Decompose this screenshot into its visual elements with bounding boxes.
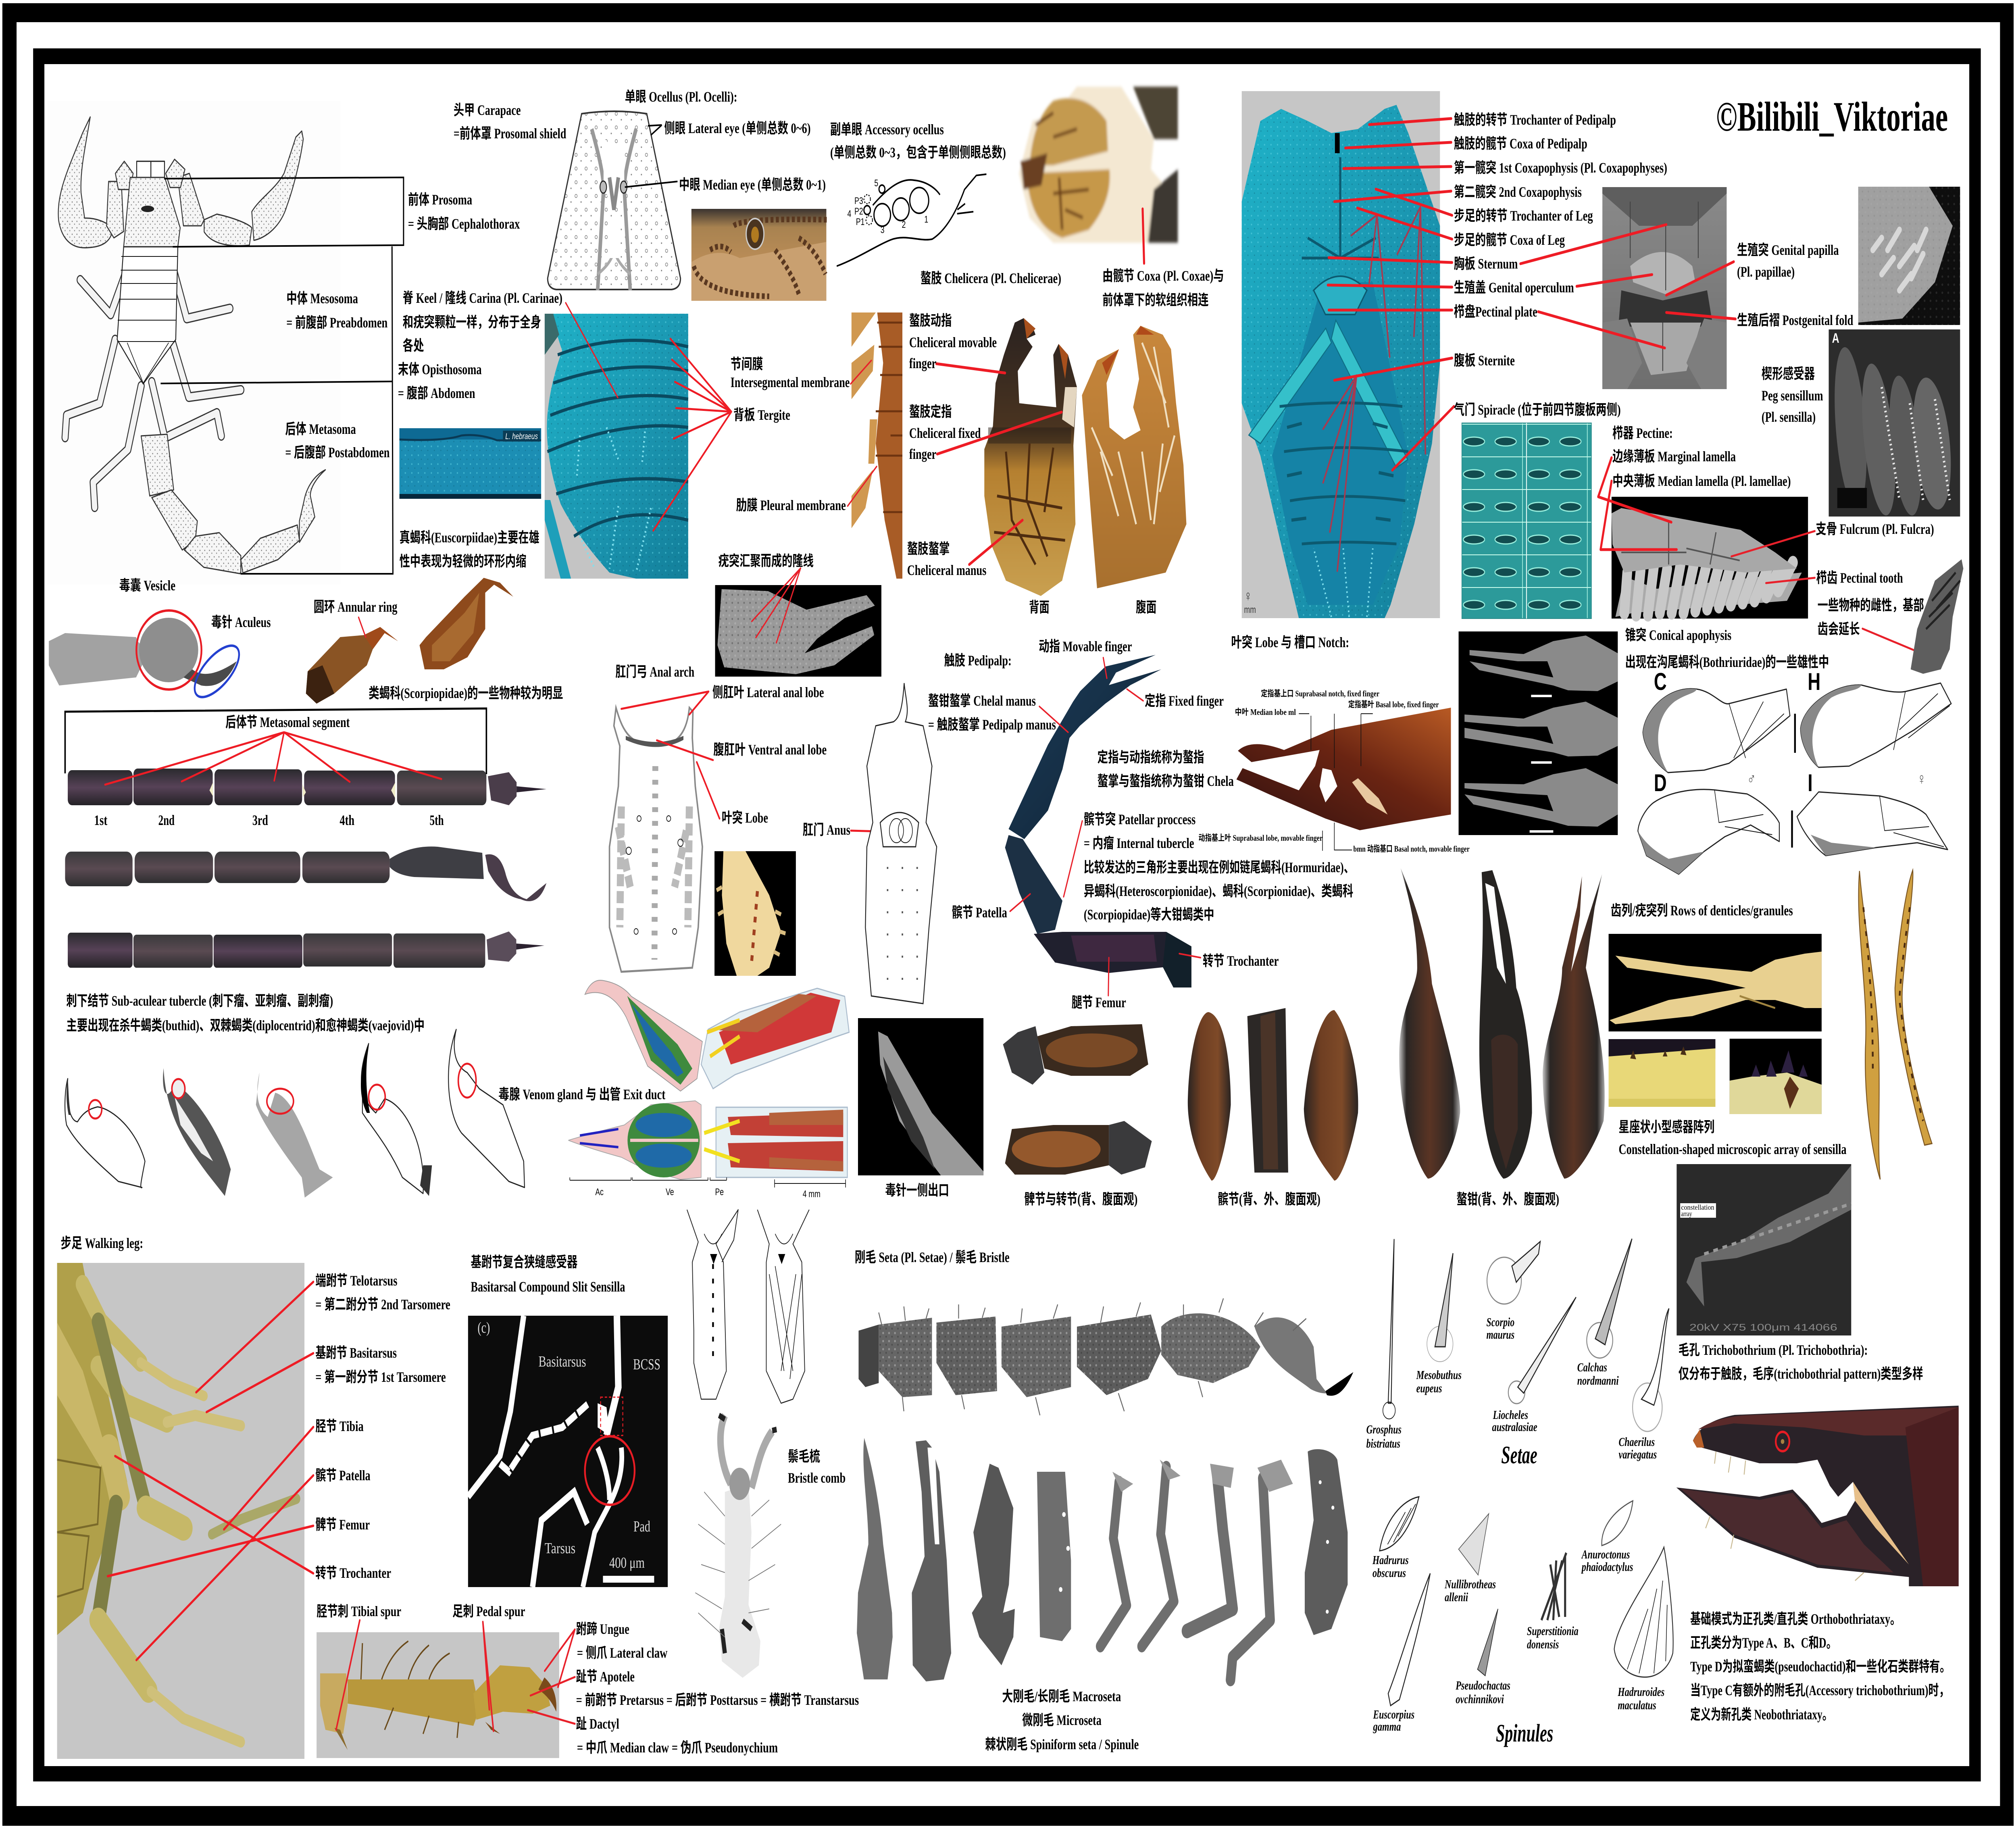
text: keel note line 2: 各处 <box>403 337 424 354</box>
species labels: spinules: Hadruroides <box>1618 1685 1664 1699</box>
segment labels: 5th <box>429 812 444 828</box>
label: movable finger en 1: Cheliceral movable <box>909 334 997 350</box>
label: coxa: 由髋节 Coxa (Pl. Coxae)与 <box>1102 268 1224 284</box>
label: patellar process: 髌节突 Patellar proccess <box>1084 811 1195 827</box>
label: sternite: 腹板 Sternite <box>1454 352 1515 369</box>
heading: walking leg: 步足 Walking leg: <box>60 1235 143 1251</box>
photo: metasoma SEM bristles <box>858 1298 1353 1415</box>
drawing: chela H female: ♂ <box>1747 770 1756 788</box>
red leaders: walking leg <box>108 1282 313 1660</box>
segment labels: 2nd <box>158 812 175 828</box>
illustration: whole scorpion line drawing <box>47 101 340 585</box>
label: movable finger zh: 螯肢动指 <box>909 312 952 329</box>
label: anus: 肛门 Anus <box>803 822 850 838</box>
metasoma row 1: ventral with labels <box>68 769 546 805</box>
label: lobe and notch: 叶突 Lobe 与 槽口 Notch: <box>1231 634 1349 650</box>
leaders: chelicera parts <box>936 364 1062 565</box>
red leaders: fulcrum and tooth <box>1731 531 1938 660</box>
label: ungue: 跗蹄 Ungue <box>576 1621 629 1637</box>
label: dactyl: 趾 Dactyl <box>576 1716 619 1732</box>
caption: patella views: 髌节(背、外、腹面观) <box>1218 1191 1320 1207</box>
photo: three chelae SEM <box>1459 631 1618 835</box>
heading: basitarsal slit sensilla en: Basitarsal Compound Slit Sensilla <box>471 1279 625 1295</box>
label: spiracle: 气门 Spiracle (位于前四节腹板两侧) <box>1454 402 1621 418</box>
label: peg sensillum zh: 楔形感受器 <box>1762 366 1815 382</box>
leaders: keels <box>752 568 801 643</box>
diagram: ocelli arrangement: P2 <box>854 206 863 217</box>
photo: constellation array SEM: constellation <box>1681 1204 1714 1212</box>
photo: chelicerae dorsal view <box>1019 87 1178 243</box>
label: median lamella: 中央薄板 Median lamella (Pl. lamellae) <box>1612 473 1791 489</box>
photo: lateral body brown <box>852 312 902 579</box>
label: trochanter leg: 转节 Trochanter <box>315 1565 391 1581</box>
label: median eye: 中眼 Median eye (单侧总数 0~1) <box>679 177 826 193</box>
illustrations: setae drawings <box>1383 1239 1669 1431</box>
label: bristle comb zh: 鬃毛梳 <box>788 1448 820 1465</box>
label: vesicle: 毒囊 Vesicle <box>119 577 175 594</box>
label: pectine: 栉器 Pectine: <box>1612 425 1673 441</box>
label: keel made of granules: 疣突汇聚而成的隆线 <box>719 553 814 569</box>
text: female pectine note 1: 一些物种的雌性，基部 <box>1818 597 1924 613</box>
label: trochanter of leg: 步足的转节 Trochanter of Leg <box>1454 208 1593 224</box>
label: median claw: = 中爪 Median claw = 伪爪 Pseudonychium <box>577 1740 778 1756</box>
micro-CT: BCSS image: (c) <box>477 1319 490 1336</box>
text: patellar note 3: (Scorpiopidae)等大钳蝎类中 <box>1084 906 1214 923</box>
scale bars: venom gland: 4 mm <box>803 1189 821 1200</box>
drawing: chela C male <box>1643 668 1795 773</box>
text: orthobothriotaxy line 2: 正孔类分为Type A、B、C和D。 <box>1690 1635 1837 1651</box>
segment labels <box>94 812 444 828</box>
caption: aculeus opening: 毒针一侧出口 <box>885 1182 949 1198</box>
text: orthobothriotaxy line 3: Type D为拟蛮蝎类(pseudochactid)和一些化石类群特有。 <box>1690 1658 1950 1675</box>
label: pleural membrane: 肋膜 Pleural membrane <box>736 497 846 513</box>
label: aculeus: 毒针 Aculeus <box>211 614 271 630</box>
photo: dorsal mesosoma teal <box>545 314 688 579</box>
photo: long yellow fingers <box>1859 870 1932 1179</box>
photo: constellation array SEM <box>1677 1164 1851 1335</box>
label: fixed finger en 2: finger <box>909 446 936 462</box>
scale bars: venom gland: Ac <box>595 1187 604 1198</box>
species labels: setae: Grosphus <box>1366 1423 1402 1436</box>
leaders: leg tip <box>336 1620 575 1731</box>
photo grid: spiracles <box>1462 423 1591 619</box>
label: genital papilla: 生殖突 Genital papilla <box>1737 242 1839 258</box>
micro-CT: BCSS image: BCSS <box>633 1356 660 1373</box>
drawing: chela H female: H <box>1808 668 1820 696</box>
photo: chelicera dorsal <box>984 318 1077 596</box>
leader: coxa <box>1143 209 1144 263</box>
illustration: anal segment ventral with anus <box>865 683 937 1004</box>
text: chela note: 螯掌与螯指统称为螯钳 Chela <box>1098 773 1234 789</box>
micro-CT: BCSS image: Tarsus <box>545 1540 575 1557</box>
label: carapace: 头甲 Carapace <box>454 102 521 118</box>
leaders: genital region <box>1520 225 1735 348</box>
label: metasomal segment: 后体节 Metasomal segment <box>225 714 350 730</box>
illustrations: spinules drawings <box>1380 1497 1673 1706</box>
photo: constellation array SEM: array <box>1681 1210 1692 1218</box>
species labels: setae: Scorpio <box>1487 1315 1514 1329</box>
label: coxa of leg: 步足的髋节 Coxa of Leg <box>1454 232 1565 248</box>
species labels: spinules: Euscorpius <box>1373 1708 1414 1721</box>
drawing: chela I female <box>1797 769 1947 856</box>
diagram: ocelli arrangement: 3 <box>881 225 885 235</box>
label: movable finger: 动指 Movable finger <box>1039 638 1132 654</box>
label: bristle comb en: Bristle comb <box>788 1470 846 1486</box>
line drawings: tarsi <box>687 1210 809 1403</box>
label: macroseta: 大刚毛/长刚毛 Macroseta <box>1002 1688 1121 1704</box>
species labels: spinules: donensis <box>1527 1637 1559 1651</box>
label: chelicera: 螯肢 Chelicera (Pl. Chelicerae) <box>921 270 1061 286</box>
label: lateral eye: 侧眼 Lateral eye (单侧总数 0~6) <box>664 120 811 136</box>
drawing: telson 5 <box>448 1029 525 1187</box>
label: pretarsus synonyms: = 前跗节 Pretarsus = 后跗节 Posttarsus = 横跗节 Transtarsus <box>576 1692 859 1708</box>
photo: yellow anal segment <box>714 851 796 976</box>
label: scorpiopidae note: 类蝎科(Scorpiopidae)的一些物种较为明显 <box>369 685 563 701</box>
label: ventral anal lobe: 腹肛叶 Ventral anal lobe <box>713 742 827 758</box>
label: pectinal plate: 栉盘Pectinal plate <box>1454 304 1537 320</box>
label: lateral claw: = 侧爪 Lateral claw <box>577 1645 668 1661</box>
species labels: setae: maurus <box>1487 1328 1514 1342</box>
label: prosomal shield: =前体罩 Prosomal shield <box>454 125 566 142</box>
photo: peg sensillum SEM <box>1829 329 1960 518</box>
photo: ventral body teal: mm <box>1244 604 1256 615</box>
species labels: setae: Calchas <box>1577 1360 1607 1374</box>
label: fixed finger: 定指 Fixed finger <box>1145 693 1224 709</box>
label: second coxapophysis: 第二髋突 2nd Coxapophysis <box>1454 184 1582 200</box>
caption: chela views: 螯钳(背、外、腹面观) <box>1456 1191 1559 1207</box>
label: femur: 腿节 Femur <box>1072 994 1126 1010</box>
species labels: setae: Liocheles <box>1493 1408 1528 1422</box>
species labels: spinules: phaiodactylus <box>1581 1560 1633 1574</box>
label: tergite: 背板 Tergite <box>733 407 790 423</box>
label: femur leg: 髀节 Femur <box>315 1517 370 1533</box>
text: sub-aculear note: 主要出现在杀牛蝎类(buthid)、双棘蝎类(diplocentrid)和愈神蝎类(vaejovid)中 <box>66 1017 425 1033</box>
diagram: ocelli arrangement: 5 <box>874 178 878 189</box>
photo: leg tip with spurs <box>317 1632 559 1758</box>
photos: bristle appendages row <box>857 1438 1347 1681</box>
photo: patella three views <box>1188 1008 1358 1181</box>
species labels: setae: Chaerilus <box>1619 1435 1655 1449</box>
label: lateral anal lobe: 侧肛叶 Lateral anal lobe <box>712 684 824 700</box>
heading: basitarsal slit sensilla zh: 基跗节复合狭缝感受器 <box>471 1254 578 1270</box>
drawing: chela C male: C <box>1654 668 1667 696</box>
label: pedipalp manus: = 触肢螯掌 Pedipalp manus <box>928 717 1056 733</box>
label: 2nd tarsomere: = 第二跗分节 2nd Tarsomere <box>315 1296 450 1312</box>
leaders: metasomal segment <box>105 732 442 785</box>
micro-CT: BCSS image: Pad <box>633 1518 650 1535</box>
label: basitarsus: 基跗节 Basitarsus <box>315 1345 397 1361</box>
metasoma row 3: dorsal <box>68 931 544 968</box>
text: euscorpiidae note line 2: 性中表现为轻微的环形内缩 <box>400 553 526 569</box>
species labels: setae: variegatus <box>1619 1448 1657 1461</box>
label: pedal spur: 足刺 Pedal spur <box>452 1603 525 1619</box>
species labels: spinules: Pseudochactas <box>1455 1679 1510 1692</box>
label: accessory ocellus: 副单眼 Accessory ocellus <box>830 121 944 137</box>
red leaders: keel and tergite <box>566 303 731 531</box>
label: constellation array en: Constellation-shaped microscopic array of sensilla <box>1619 1141 1847 1157</box>
model: venom gland dorsal <box>569 1101 848 1179</box>
metasoma row 2: lateral <box>65 846 546 901</box>
photo: yellow chela on black <box>1609 934 1822 1031</box>
diagram: ocelli arrangement: P1 <box>856 217 864 227</box>
leaders: membranes <box>848 360 877 506</box>
label: manus en: Cheliceral manus <box>907 562 986 578</box>
bracket: metasomal segments <box>65 708 486 774</box>
label: fulcrum: 支骨 Fulcrum (Pl. Fulcra) <box>1816 521 1934 537</box>
photo: ventral body teal <box>1242 91 1440 618</box>
small labels: notch terms: bmn 动指基口 Basal notch, movable finger <box>1353 844 1470 854</box>
text: orthobothriotaxy line 1: 基础模式为正孔类/直孔类 Orthobothriataxy。 <box>1690 1611 1901 1627</box>
label: annular ring: 圆环 Annular ring <box>314 599 398 615</box>
species labels: spinules: allenii <box>1445 1590 1468 1604</box>
label: telotarsus: 端跗节 Telotarsus <box>315 1273 397 1289</box>
leader: annular ring <box>358 617 366 637</box>
label: mesosoma: 中体 Mesosoma <box>286 290 358 306</box>
heading: seta: 刚毛 Seta (Pl. Setae) / 鬃毛 Bristle <box>855 1249 1010 1265</box>
photo: femur ventral <box>1005 1121 1152 1175</box>
label: venom gland: 毒腺 Venom gland 与 出管 Exit duct <box>498 1086 666 1102</box>
diagram: ocelli arrangement: P3 <box>854 196 863 206</box>
species labels: spinules: Superstitionia <box>1527 1624 1579 1638</box>
species labels: spinules: ovchinnikovi <box>1456 1692 1504 1706</box>
photo: chelicera ventral <box>1082 326 1186 588</box>
species labels: spinules: Hadrurus <box>1372 1553 1409 1567</box>
small labels: notch terms: 定指基叶 Basal lobe, fixed finger <box>1348 700 1439 709</box>
label: intersegmental membrane: 节间膜 <box>731 356 763 372</box>
drawing: chela I female: I <box>1808 769 1813 797</box>
segment labels: 3rd <box>252 812 268 828</box>
leaders: anal segment <box>621 692 720 819</box>
label: spiniform seta: 棘状刚毛 Spiniform seta / Spinule <box>985 1736 1139 1752</box>
red leaders: ventral body <box>1328 119 1454 470</box>
label: genital operculum: 生殖盖 Genital operculum <box>1454 279 1574 296</box>
label: tibial spur: 胫节刺 Tibial spur <box>317 1603 401 1619</box>
photo: peg sensillum SEM: A <box>1832 331 1839 346</box>
label: opisthosoma: 末体 Opisthosoma <box>398 361 482 377</box>
red leaders: pectine <box>1598 458 1677 550</box>
label: dorsal: 背面 <box>1029 599 1050 615</box>
text: euscorpiidae note line 1: 真蝎科(Euscorpiidae)主要在雄 <box>400 529 539 546</box>
label: coxa of pedipalp: 触肢的髋节 Coxa of Pedipalp <box>1454 135 1587 152</box>
species labels: setae: australasiae <box>1492 1420 1537 1434</box>
text: conical apophysis note: 出现在沟尾蝎科(Bothriuridae)的一些雄性中 <box>1625 654 1829 670</box>
photo: L. hebraeus annular ring strip: L. hebraeus <box>505 431 538 441</box>
label: intersegmental membrane english: Intersegmental membrane <box>731 374 850 390</box>
photo: chela with notch labels <box>1236 708 1451 851</box>
photo: chela with trichobothrium <box>1677 1406 1959 1586</box>
photo: median eye close-up <box>691 209 829 301</box>
drawing: telson 3 grey <box>256 1073 333 1198</box>
label: keel carina: 脊 Keel / 隆线 Carina (Pl. Carinae) <box>403 290 562 306</box>
label: patella: 髌节 Patella <box>952 904 1007 921</box>
species labels: spinules: maculatus <box>1618 1698 1656 1712</box>
segment labels: 1st <box>94 812 108 828</box>
diagram: ocelli arrangement <box>837 174 986 266</box>
label: movable finger en 2: finger <box>909 355 936 371</box>
bracket lines: body tagmata <box>160 177 404 574</box>
heading: setae: Setae <box>1501 1441 1537 1469</box>
species labels: setae: bistriatus <box>1366 1437 1400 1450</box>
label: cephalothorax: = 头胸部 Cephalothorax <box>408 216 520 232</box>
label: postgenital fold: 生殖后褶 Postgenital fold <box>1737 312 1854 328</box>
label: fixed finger en 1: Cheliceral fixed <box>909 425 981 441</box>
photo: denticles close-up 2 <box>1730 1039 1822 1114</box>
scale bars: venom gland <box>570 1177 846 1200</box>
label: fixed finger zh: 螯肢定指 <box>909 404 952 420</box>
species labels: spinules: Nullibrotheas <box>1444 1577 1496 1591</box>
text: orthobothriotaxy line 5: 定义为新孔类 Neobothriataxy。 <box>1690 1706 1833 1723</box>
label: trichobothrium: 毛孔 Trichobothrium (Pl. Trichobothria): <box>1679 1342 1868 1358</box>
text: patellar note 1: 比较发达的三角形主要出现在例如链尾蝎科(Hormuridae)、 <box>1084 859 1354 875</box>
drawing: chela H female <box>1747 668 1951 788</box>
text: accessory ocellus count: (单侧总数 0~3，包含于单侧侧眼总数) <box>830 144 1006 160</box>
photo: annular ring dorsal <box>420 578 513 669</box>
label: postabdomen: = 后腹部 Postabdomen <box>285 444 390 460</box>
photo: constellation array SEM: 20kV X75 100μm 414066 <box>1689 1322 1837 1333</box>
drawing: chela D male: D <box>1654 769 1667 797</box>
small labels: notch terms: 动指基上叶 Suprabasal lobe, movable finger <box>1199 833 1322 843</box>
species labels: spinules: obscurus <box>1372 1566 1406 1580</box>
leader: anus <box>851 831 893 832</box>
label: sensilla plural: (Pl. sensilla) <box>1762 409 1816 425</box>
label: trochanter: 转节 Trochanter <box>1203 953 1279 969</box>
scale bars: venom gland: Pe <box>715 1187 724 1198</box>
photo: keeled chela SEM <box>715 585 881 677</box>
label: peg sensillum en: Peg sensillum <box>1762 387 1823 404</box>
label: patella leg: 髌节 Patella <box>315 1467 371 1483</box>
label: lobe: 叶突 Lobe <box>722 810 768 826</box>
heading: ocellus: 单眼 Ocellus (Pl. Ocelli): <box>625 89 737 105</box>
scale bars: venom gland: Ve <box>666 1187 674 1198</box>
micro-CT: BCSS image <box>468 1316 668 1587</box>
small labels: notch terms <box>1199 689 1470 854</box>
label: sub-aculear tubercle: 刺下结节 Sub-aculear tubercle (刺下瘤、亚刺瘤、副刺瘤) <box>66 993 333 1009</box>
photo: ventral body teal: ♀ <box>1244 587 1252 604</box>
caption: femur views: 髀节与转节(背、腹面观) <box>1024 1191 1137 1207</box>
photo: female pectine <box>1911 559 1963 674</box>
text: patellar note 2: 异蝎科(Heteroscorpionidae)、蝎科(Scorpionidae)、类蝎科 <box>1084 883 1353 899</box>
illustration: pedipalp dark photo <box>1005 655 1191 987</box>
photo: walking legs <box>57 1263 304 1759</box>
diagram: ocelli arrangement: 1 <box>924 214 928 225</box>
photo: genital papilla SEM <box>1858 187 1960 325</box>
photo: pectine <box>1612 497 1808 619</box>
text: female pectine note 2: 齿会延长 <box>1818 621 1860 637</box>
label: apotele: 趾节 Apotele <box>576 1669 635 1685</box>
photo: L. hebraeus annular ring strip <box>400 428 541 499</box>
small labels: notch terms: 中叶 Median lobe ml <box>1235 708 1296 717</box>
label: sternum: 胸板 Sternum <box>1454 256 1518 272</box>
heading: spinules: Spinules <box>1496 1719 1553 1747</box>
photo: chela three views <box>1399 868 1605 1179</box>
diagram: ocelli arrangement: 2 <box>902 219 906 230</box>
micro-CT: BCSS image: Basitarsus <box>538 1353 586 1370</box>
label: prosoma: 前体 Prosoma <box>408 192 472 208</box>
diagram: ocelli arrangement: 4 <box>848 208 852 219</box>
species labels: spinules: Anuroctonus <box>1581 1548 1630 1561</box>
drawing: chela H female: ♀ <box>1917 770 1926 788</box>
species labels: setae: nordmanni <box>1577 1374 1619 1387</box>
photo: denticles close-up 1 <box>1609 1039 1715 1115</box>
text: fingers note: 定指与动指统称为螯指 <box>1098 749 1204 765</box>
photo: vesicle and aculeus <box>49 610 245 706</box>
species labels: setae: Mesobuthus <box>1416 1368 1462 1382</box>
photo: annular ring side <box>306 627 398 704</box>
label: ventral: 腹面 <box>1136 599 1156 615</box>
illustration: bristle comb <box>695 1415 781 1678</box>
leaders: pedipalp <box>1010 658 1201 996</box>
label: 1st tarsomere: = 第一跗分节 1st Tarsomere <box>315 1369 446 1385</box>
label: first coxapophysis: 第一髋突 1st Coxapophysis (Pl. Coxapophyses) <box>1454 160 1667 176</box>
drawing: telson 1 <box>65 1079 145 1188</box>
label: microseta: 微刚毛 Microseta <box>1022 1712 1102 1728</box>
label: metasoma: 后体 Metasoma <box>285 421 356 437</box>
label: rows of denticles: 齿列/疣突列 Rows of denticles/granules <box>1611 902 1793 919</box>
species labels: spinules: gamma <box>1373 1720 1401 1733</box>
small labels: notch terms: 定指基上口 Suprabasal notch, fixed finger <box>1261 689 1379 698</box>
species labels: setae <box>1366 1315 1657 1461</box>
text: trichobothrium note: 仅分布于触肢，毛序(trichobothrial pattern)类型多样 <box>1679 1366 1923 1382</box>
photo: aculeus side opening <box>858 1018 983 1175</box>
species labels: spinules <box>1372 1548 1664 1733</box>
segment labels: 4th <box>339 812 354 828</box>
text: orthobothriotaxy line 4: 当Type C有额外的附毛孔(Accessory trichobothrium)时， <box>1690 1682 1949 1698</box>
label: papillae plural: (Pl. papillae) <box>1737 264 1795 280</box>
drawing: telson 2 stippled <box>163 1068 231 1196</box>
label: manus zh: 螯肢螯掌 <box>907 541 950 557</box>
heading: pedipalp: 触肢 Pedipalp: <box>944 652 1012 669</box>
micro-CT: BCSS image: 400 μm <box>609 1554 645 1571</box>
label: trochanter of pedipalp: 触肢的转节 Trochanter of Pedipalp <box>1454 112 1616 128</box>
leader lines: ocelli <box>625 125 677 187</box>
label: anal arch: 肛门弓 Anal arch <box>615 664 695 680</box>
label: internal tubercle: = 内瘤 Internal tubercle <box>1084 835 1194 851</box>
watermark title: ©Bilibili_Viktoriae <box>1716 94 1948 140</box>
label: abdomen: = 腹部 Abdomen <box>398 385 475 401</box>
text: coxa note: 前体罩下的软组织相连 <box>1102 292 1209 308</box>
species labels: setae: eupeus <box>1416 1381 1442 1395</box>
photo: genital region grey <box>1602 187 1727 389</box>
label: marginal lamella: 边缘薄板 Marginal lamella <box>1612 448 1736 465</box>
label: conical apophysis: 锥突 Conical apophysis <box>1625 627 1731 643</box>
label: tibia: 胫节 Tibia <box>315 1418 364 1434</box>
model: venom gland lateral <box>585 980 849 1091</box>
illustration: anal segment <box>610 708 702 972</box>
label: pectinal tooth: 栉齿 Pectinal tooth <box>1816 570 1903 586</box>
label: chelal manus: 螯钳螯掌 Chelal manus <box>928 693 1036 709</box>
drawing: telson 4 <box>361 1044 432 1196</box>
faint spiracle leaders <box>1323 207 1425 571</box>
label: preabdomen: = 前腹部 Preabdomen <box>286 315 388 331</box>
label: constellation array zh: 星座状小型感器阵列 <box>1619 1119 1714 1135</box>
text: keel note line 1: 和疣突颗粒一样，分布于全身 <box>403 314 541 330</box>
illustration: carapace with ocelli <box>548 111 681 290</box>
drawing: chela D male <box>1638 769 1792 874</box>
photo: femur dorsal <box>1003 1024 1148 1085</box>
